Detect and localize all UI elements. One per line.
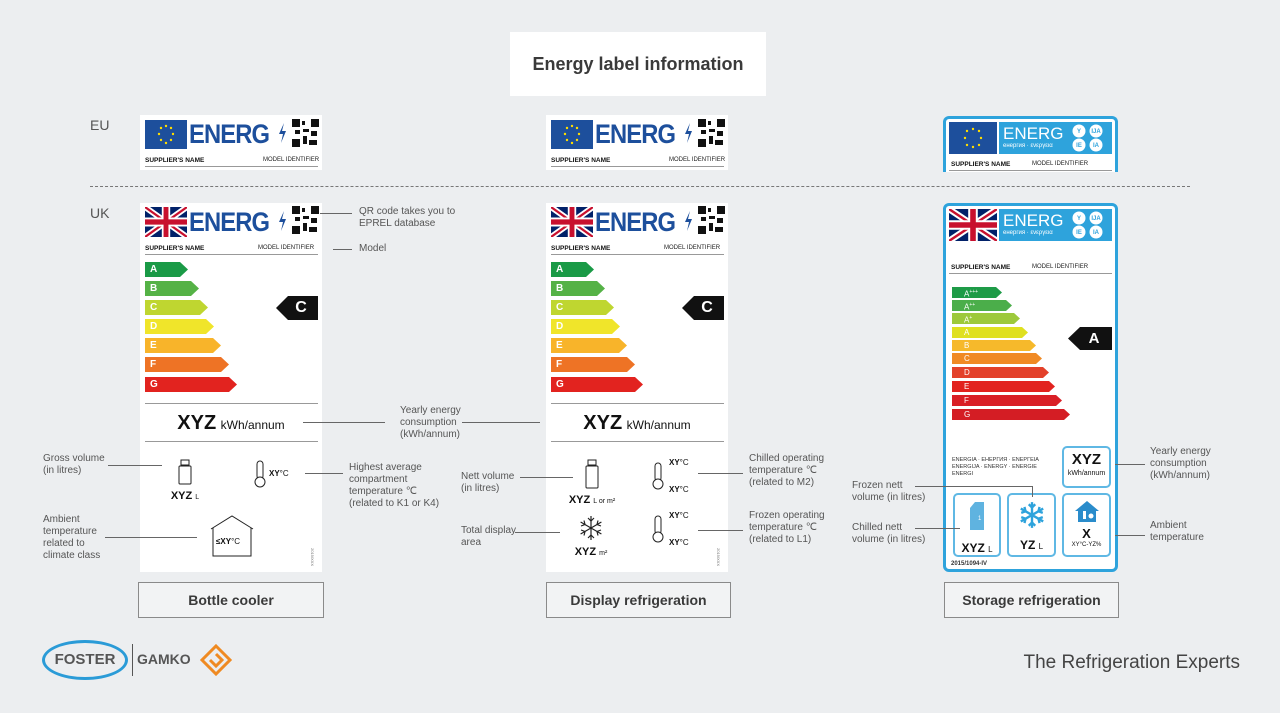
box: ambient temperature: XY°C-YZ% [1072,542,1101,548]
UK label: storage refrigeration: IA [1093,230,1100,236]
annotation: highest average temperature: temperature ℃ [349,486,417,497]
annotation: ambient climate class: related to [43,538,85,549]
category: display refrigeration [546,582,731,618]
energy scale bars: B [964,341,969,350]
annotation: ambient climate class: Ambient [43,514,80,525]
annotation: highest average temperature [349,462,439,509]
rating arrow C: C [701,299,713,316]
UK label: bottle cooler: 2019/XXX [310,548,315,566]
box: yearly energy: kWh/annum [1068,470,1105,477]
annotation: storage yearly energy: (kWh/annum) [1150,470,1210,481]
UK label: storage refrigeration: MODEL IDENTIFIER [1032,264,1088,270]
UK label: display refrigeration: MODEL IDENTIFIER [664,245,720,251]
box: chilled volume [953,493,1001,557]
energy scale bars: G [150,379,158,390]
energy scale bars: A [964,328,969,337]
UK label: storage refrigeration: IE [1076,230,1082,236]
icon: house ambient [210,515,254,556]
annotation: chilled nett volume [852,522,925,545]
UK label: bottle cooler [140,203,322,572]
EU label: display refrigeration: SUPPLIER'S NAME [551,157,610,164]
energy scale bars: C [150,302,157,313]
row label: EU: EU [90,117,109,133]
annotation: chilled nett volume: volume (in litres) [852,534,925,545]
EU label: bottle cooler [140,115,322,170]
EU label: storage refrigeration: IE [1076,143,1082,149]
annotation: gross volume: (in litres) [43,465,81,476]
energy scale bars [551,262,643,392]
annotation: ambient climate class [43,514,100,561]
multilingual text [952,457,1039,477]
annotation: total display area: area [461,537,481,548]
multilingual text: ENERGIJA · ENERGY · ENERGIE [952,464,1037,470]
logo: Foster Gamko [42,640,232,680]
annotation: storage yearly energy [1150,446,1211,481]
energy consumption: XYZ kWh/annum [177,412,285,434]
icon: thermometer [254,460,289,488]
annotation: chilled operating temperature: temperature ℃ [749,465,817,476]
icon: snowflake display area: XYZ m² [575,546,607,558]
UK label: storage refrigeration: енергия · ενεργεια [1003,230,1053,236]
UK label: bottle cooler: SUPPLIER'S NAME [145,245,204,252]
rating arrow C [682,296,724,320]
annotation: QR code: EPREL database [359,218,435,229]
annotation: model: Model [359,243,386,254]
energy scale bars: E [556,340,563,351]
rating arrow C: C [295,299,307,316]
icon: bottle nett volume: XYZ L or m² [569,494,615,506]
energy scale bars: D [150,321,157,332]
UK label: storage refrigeration: IJA [1091,216,1101,222]
annotation: chilled nett volume: Chilled nett [852,522,902,533]
energy consumption: XYZ kWh/annum [583,412,691,434]
icon: UK flag [551,207,593,237]
annotation: yearly energy consumption: (kWh/annum) [400,429,460,440]
annotation: QR code: QR code takes you to [359,206,455,217]
box: chilled volume: XYZ L [961,541,993,555]
UK label: storage refrigeration [943,203,1118,572]
annotation: frozen operating temperature: (related to L1) [749,534,811,545]
UK label: bottle cooler: MODEL IDENTIFIER [258,245,314,251]
energy scale bars: A++ [964,302,975,312]
EU label: bottle cooler: ENERG [189,119,269,149]
energy scale bars: F [556,359,562,370]
EU label: storage refrigeration: IA [1093,143,1100,149]
annotation: total display area [461,525,516,548]
UK label: display refrigeration: SUPPLIER'S NAME [551,245,610,252]
annotation: storage ambient temperature: temperature [1150,532,1204,543]
icon: thermometer chilled [652,458,689,494]
icon: thermometer chilled: XY°C [669,485,689,494]
EU label: storage refrigeration: Y [1077,129,1081,135]
energy scale bars: D [556,321,563,332]
box: ambient temperature [1062,493,1111,557]
energy scale bars: E [964,382,969,391]
energy scale bars: A [150,264,157,275]
multilingual text: ENERGI [952,471,973,477]
annotation: ambient climate class: climate class [43,550,100,561]
annotation: yearly energy consumption: consumption [400,417,457,428]
icon: snowflake display area [574,516,608,558]
annotation: frozen operating temperature [749,510,825,545]
EU label: display refrigeration [546,115,728,170]
UK label: storage refrigeration: ENERG [1003,211,1063,230]
icon: bottle nett volume [569,460,616,506]
icon: thermometer frozen [652,511,689,547]
energy scale bars: C [556,302,563,313]
energy scale bars: B [150,283,157,294]
box: frozen volume [1007,493,1056,557]
EU label: storage refrigeration [943,116,1118,172]
annotation: storage ambient temperature [1150,520,1204,543]
box: chilled volume: 1 [978,516,982,522]
EU label: storage refrigeration: енергия · ενεργεια [1003,143,1053,149]
energy scale bars: D [964,368,970,377]
annotation: frozen nett volume: volume (in litres) [852,492,925,503]
EU label: storage refrigeration: MODEL IDENTIFIER [1032,161,1088,167]
annotation: highest average temperature: Highest average [349,462,422,473]
logo: Foster Gamko: FOSTER [55,651,115,668]
tagline: The Refrigeration Experts [1024,652,1240,673]
title [510,32,766,96]
energy scale bars: A+++ [964,289,978,299]
annotation: chilled operating temperature: (related to M2) [749,477,814,488]
UK label: storage refrigeration: 2015/1094-IV [951,561,987,567]
category: storage refrigeration [944,582,1119,618]
icon: thermometer: XY°C [269,469,289,478]
energy scale bars [145,262,237,392]
annotation: QR code [359,206,455,229]
UK label: storage refrigeration: SUPPLIER'S NAME [951,264,1010,271]
energy scale bars: A [556,264,563,275]
category: storage refrigeration: Storage refrigeration [962,592,1101,608]
annotation: yearly energy consumption [400,405,461,440]
annotation: nett volume: Nett volume [461,471,514,482]
energy scale bars: E [150,340,157,351]
annotation: frozen nett volume [852,480,925,503]
EU label: display refrigeration: ENERG [595,119,675,149]
row label: UK: UK [90,205,109,221]
energy scale bars: G [556,379,564,390]
energy scale bars: A+ [964,315,972,325]
annotation: nett volume [461,471,514,494]
annotation: frozen operating temperature: Frozen operating [749,510,825,521]
box: frozen volume: YZ L [1020,538,1043,552]
annotation: ambient climate class: temperature [43,526,97,537]
icon: thermometer frozen: XY°C [669,511,689,520]
icon: thermometer chilled: XY°C [669,458,689,467]
icon: UK flag [949,209,997,241]
box: ambient temperature: X [1082,526,1091,541]
UK label: storage refrigeration: Y [1077,216,1081,222]
rating arrow A [1068,327,1112,350]
box: yearly energy: XYZ [1072,451,1101,468]
annotation: chilled operating temperature [749,453,824,488]
energy scale bars: F [964,396,969,405]
EU label: bottle cooler: MODEL IDENTIFIER [263,157,319,163]
annotation: highest average temperature: compartment [349,474,407,485]
EU label: bottle cooler: SUPPLIER'S NAME [145,157,204,164]
logo: Foster Gamko: GAMKO [137,651,191,667]
icon: UK flag [145,207,187,237]
UK label: display refrigeration: 2019/XXX [716,548,721,566]
annotation: frozen operating temperature: temperature ℃ [749,522,817,533]
annotation: storage ambient temperature: Ambient [1150,520,1187,531]
energy scale bars: C [964,354,970,363]
energy scale bars [952,287,1070,420]
annotation: total display area: Total display [461,525,516,536]
rating arrow C [276,296,318,320]
title: Energy label information [532,54,744,74]
energy scale bars: F [150,359,156,370]
annotation: gross volume [43,453,105,476]
box: yearly energy [1062,446,1111,488]
icon: bottle: XYZ L [171,490,199,502]
EU label: storage refrigeration: SUPPLIER'S NAME [951,161,1010,168]
UK label: bottle cooler: ENERG [189,207,269,237]
energy scale bars: G [964,410,970,419]
rating arrow A: A [1089,330,1099,347]
annotation: storage yearly energy: consumption [1150,458,1207,469]
category: display refrigeration: Display refrigeration [570,592,707,608]
annotation: storage yearly energy: Yearly energy [1150,446,1211,457]
EU label: storage refrigeration: ENERG [1003,124,1063,143]
icon: bottle [171,460,199,502]
icon: house ambient: ≤XY°C [216,537,240,546]
annotation: gross volume: Gross volume [43,453,105,464]
annotation: chilled operating temperature: Chilled operating [749,453,824,464]
annotation: highest average temperature: (related to K1 or K4) [349,498,439,509]
EU label: storage refrigeration: IJA [1091,129,1101,135]
annotation: nett volume: (in litres) [461,483,499,494]
EU label: display refrigeration: MODEL IDENTIFIER [669,157,725,163]
annotation: frozen nett volume: Frozen nett [852,480,903,491]
icon: thermometer frozen: XY°C [669,538,689,547]
energy scale bars: B [556,283,563,294]
UK label: display refrigeration [546,203,728,572]
multilingual text: ENERGIA · ЕНЕРГИЯ · ΕΝΕΡΓΕΙΑ [952,457,1039,463]
category: bottle cooler [138,582,324,618]
category: bottle cooler: Bottle cooler [188,592,274,608]
annotation: yearly energy consumption: Yearly energy [400,405,461,416]
UK label: display refrigeration: ENERG [595,207,675,237]
